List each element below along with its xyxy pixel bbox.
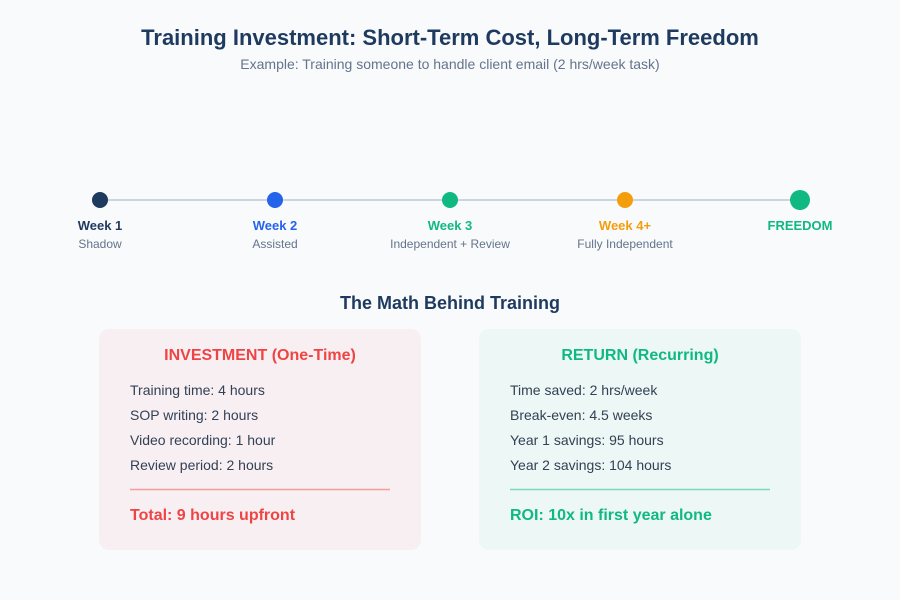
milestone: week 1: Week 1 [78, 218, 122, 233]
panel: investment: INVESTMENT (One-Time) [164, 347, 356, 364]
panel: investment [99, 329, 421, 550]
milestone: week 4+: Week 4+ [599, 218, 651, 233]
title: Training Investment: Short-Term Cost, Long-Term Freedom [141, 25, 759, 50]
milestone: week 2: Week 2 [253, 218, 297, 233]
panel: investment: Review period: 2 hours [130, 457, 273, 473]
panel: return: Year 1 savings: 95 hours [510, 432, 664, 448]
milestone: week 3: Week 3 [428, 218, 472, 233]
timeline [78, 190, 832, 251]
milestone: freedom [768, 190, 832, 233]
panel: investment: Training time: 4 hours [130, 382, 265, 398]
panel: return: RETURN (Recurring) [561, 347, 719, 364]
milestone: week 4+: Fully Independent [577, 237, 673, 251]
subtitle: Example: Training someone to handle client email (2 hrs/week task) [240, 56, 660, 72]
milestone: week 1: Shadow [78, 237, 122, 251]
panel: return: Time saved: 2 hrs/week [510, 382, 658, 398]
panel: return: Year 2 savings: 104 hours [510, 457, 671, 473]
panel: investment: Total: 9 hours upfront [130, 507, 296, 524]
panel: return [479, 329, 801, 550]
panel: investment: SOP writing: 2 hours [130, 407, 258, 423]
milestone: week 2: Assisted [252, 237, 298, 251]
section heading: The Math Behind Training [340, 293, 560, 313]
panel: investment: Video recording: 1 hour [130, 432, 276, 448]
milestone: week 4+ [577, 192, 673, 251]
panel: return: ROI: 10x in first year alone [510, 507, 712, 524]
milestone: freedom: FREEDOM [768, 218, 832, 233]
milestone: week 2 [252, 192, 298, 251]
panel: return: Break-even: 4.5 weeks [510, 407, 652, 423]
milestone: week 1 [78, 192, 122, 251]
milestone: week 3 [390, 192, 510, 251]
milestone: week 3: Independent + Review [390, 237, 510, 251]
